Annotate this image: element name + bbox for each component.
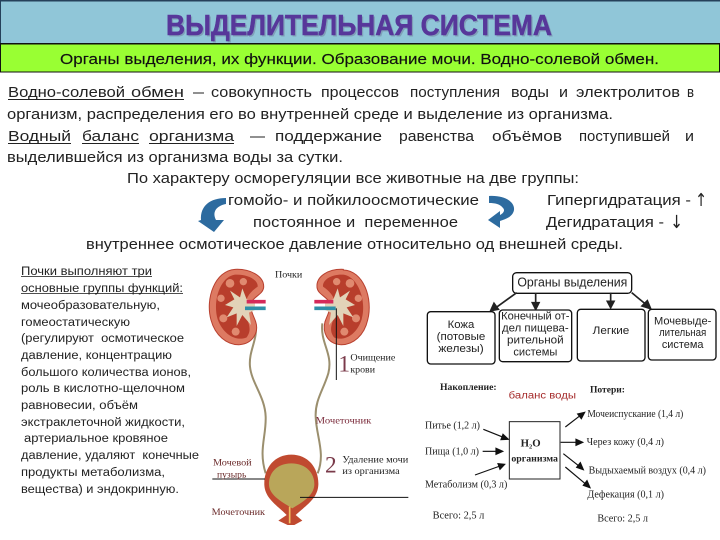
headings: Потери: [590,385,625,396]
title: ВЫДЕЛИТЕЛЬНАЯ СИСТЕМА [168,12,554,44]
diagram: excretory organs [427,273,716,364]
box: digestive: дел пищева- [502,322,569,334]
text block: definitions: — [250,128,265,145]
text block: definitions: равенства [399,128,475,145]
text block: definitions: поступления [410,84,500,101]
anatomy labels: Очищение [350,353,395,364]
text block: kidney functions: давление, удаляют конечные [21,450,199,462]
icon: left curved arrow [198,198,226,232]
text block: definitions: и [685,128,694,145]
text block: osmoregulation: гомойо- и пойкилоосмотические [228,192,479,209]
text block: definitions: поступившей [579,128,670,145]
H2O box [509,422,560,479]
intake labels: Всего: 2,5 л [433,509,485,521]
text block: definitions: — [193,84,204,101]
text block: osmoregulation: Гипергидратация - [547,192,691,209]
text block: kidney functions: вещества) и эндокринную. [21,484,179,496]
text block: definitions: и [559,84,568,101]
box: urinary: Мочевыде- [654,316,712,328]
connector arrows [491,293,651,311]
box: urinary [648,309,716,360]
anatomy labels: из организма [342,466,400,477]
text block: definitions: процессов [321,84,399,101]
text block: definitions: организма [149,128,235,145]
text block: kidney functions: продукты метаболизма, [21,467,165,479]
text block: definitions: Водно-солевой [8,84,125,101]
right kidney [314,269,369,345]
box: lungs [577,309,645,361]
box: digestive [499,310,572,362]
bladder [264,455,318,525]
text block: osmoregulation: Дегидратация - [546,214,664,231]
loss labels: Мочеиспускание (1,4 л) [587,408,684,420]
box: skin: (потовые [437,331,485,343]
text block: osmoregulation: постоянное и переменное [253,214,458,231]
title: ВЫДЕЛИТЕЛЬНАЯ СИСТЕМА [166,10,552,42]
box: lungs: Легкие [593,325,629,337]
box: digestive: Конечный от- [501,310,570,322]
text block: definitions: организм, распределения его во внутренней среде и выделение из организма. [7,106,613,123]
anatomy labels: Мочеточник [212,507,265,518]
text block: definitions: в [687,84,694,101]
anatomy labels: Мочевой [213,457,252,468]
diagram: water balance [425,382,706,525]
anatomy labels: Почки [275,269,302,280]
text block: definitions: обмен [131,84,184,101]
H2O box: организма [511,454,558,465]
headings [440,382,625,396]
text block: kidney functions: большого количества ионов, [21,367,191,379]
loss labels: Выдыхаемый воздух (0,4 л) [589,464,706,476]
box: urinary: лительная [659,327,707,339]
header band [0,0,720,44]
box: digestive: системы [513,346,557,358]
text block: definitions: выделившейся из организма воды за сутки. [7,149,343,166]
text block: kidney functions: основные группы функций: [21,283,183,295]
left kidney [209,269,266,345]
intake labels: Пища (1,0 л) [425,445,479,457]
leader lines [212,308,408,497]
text block: definitions: Водный [8,128,71,145]
headings: Накопление: [440,382,497,393]
subtitle band: Органы выделения, их функции. Образование мочи. Водно-солевой обмен. [60,51,659,68]
text block: kidney functions: гомеостатическую [21,317,130,329]
anatomy labels: 1 [338,351,350,377]
text block: definitions [7,84,694,166]
text block: osmoregulation [86,170,707,253]
text block: kidney functions: роль в кислотно-щелочном [21,383,185,395]
top box: Органы выделения [517,276,627,290]
text block: definitions: поддержание [275,128,382,145]
intake labels: Метаболизм (0,3 л) [425,479,508,491]
text block: definitions: совокупность [211,84,312,101]
H2O box: H₂O [521,439,541,450]
anatomy labels: Удаление мочи [342,455,408,466]
anatomy labels: пузырь [217,469,247,480]
top box [513,273,632,293]
intake labels: Питье (1,2 л) [425,419,480,431]
icon: right curved arrow [488,196,514,228]
text block: kidney functions: артериальное кровяное [24,433,168,445]
anatomy labels: 2 [325,453,337,479]
loss labels [587,408,706,525]
box: skin [427,312,495,364]
text block: osmoregulation: внутреннее осмотическое давление относительно од внешней среды. [86,236,623,253]
text block: kidney functions [21,266,199,496]
text block: kidney functions: (регулируют осмотическое [21,333,184,345]
text block: osmoregulation: ↑ [695,190,707,211]
text block: kidney functions: мочеобразовательную, [21,300,160,312]
flow arrows [475,412,590,488]
text block: kidney functions: экстраклеточной жидкости, [21,417,185,429]
intake labels [425,419,508,521]
text block: kidney functions: Почки выполняют три [21,266,152,278]
box: urinary: система [662,339,704,351]
anatomy labels [212,269,408,518]
text block: definitions: воды [511,84,549,101]
anatomy labels: крови [350,364,375,375]
loss labels: Дефекация (0,1 л) [587,489,664,501]
loss labels: Всего: 2,5 л [597,513,648,525]
text block: definitions: электролитов [576,84,680,101]
text block: definitions: объёмов [492,128,562,145]
text block: kidney functions: равновесии, объём [21,400,138,412]
text block: osmoregulation: По характеру осморегуляции все животные на две группы: [127,170,579,187]
loss labels: Через кожу (0,4 л) [587,436,664,448]
red label: баланс воды [509,389,576,401]
box: skin: железы) [438,343,484,355]
box: skin: Кожа [448,319,475,331]
text block: definitions: баланс [82,128,140,145]
subtitle band [0,44,720,72]
ureters [250,323,329,473]
anatomy diagram: urinary system [209,269,408,525]
box: digestive: рительной [507,334,564,346]
text block: kidney functions: давление, концентрацию [21,350,172,362]
text block: osmoregulation: ↓ [670,212,683,233]
anatomy labels: Мочеточник [316,415,372,426]
